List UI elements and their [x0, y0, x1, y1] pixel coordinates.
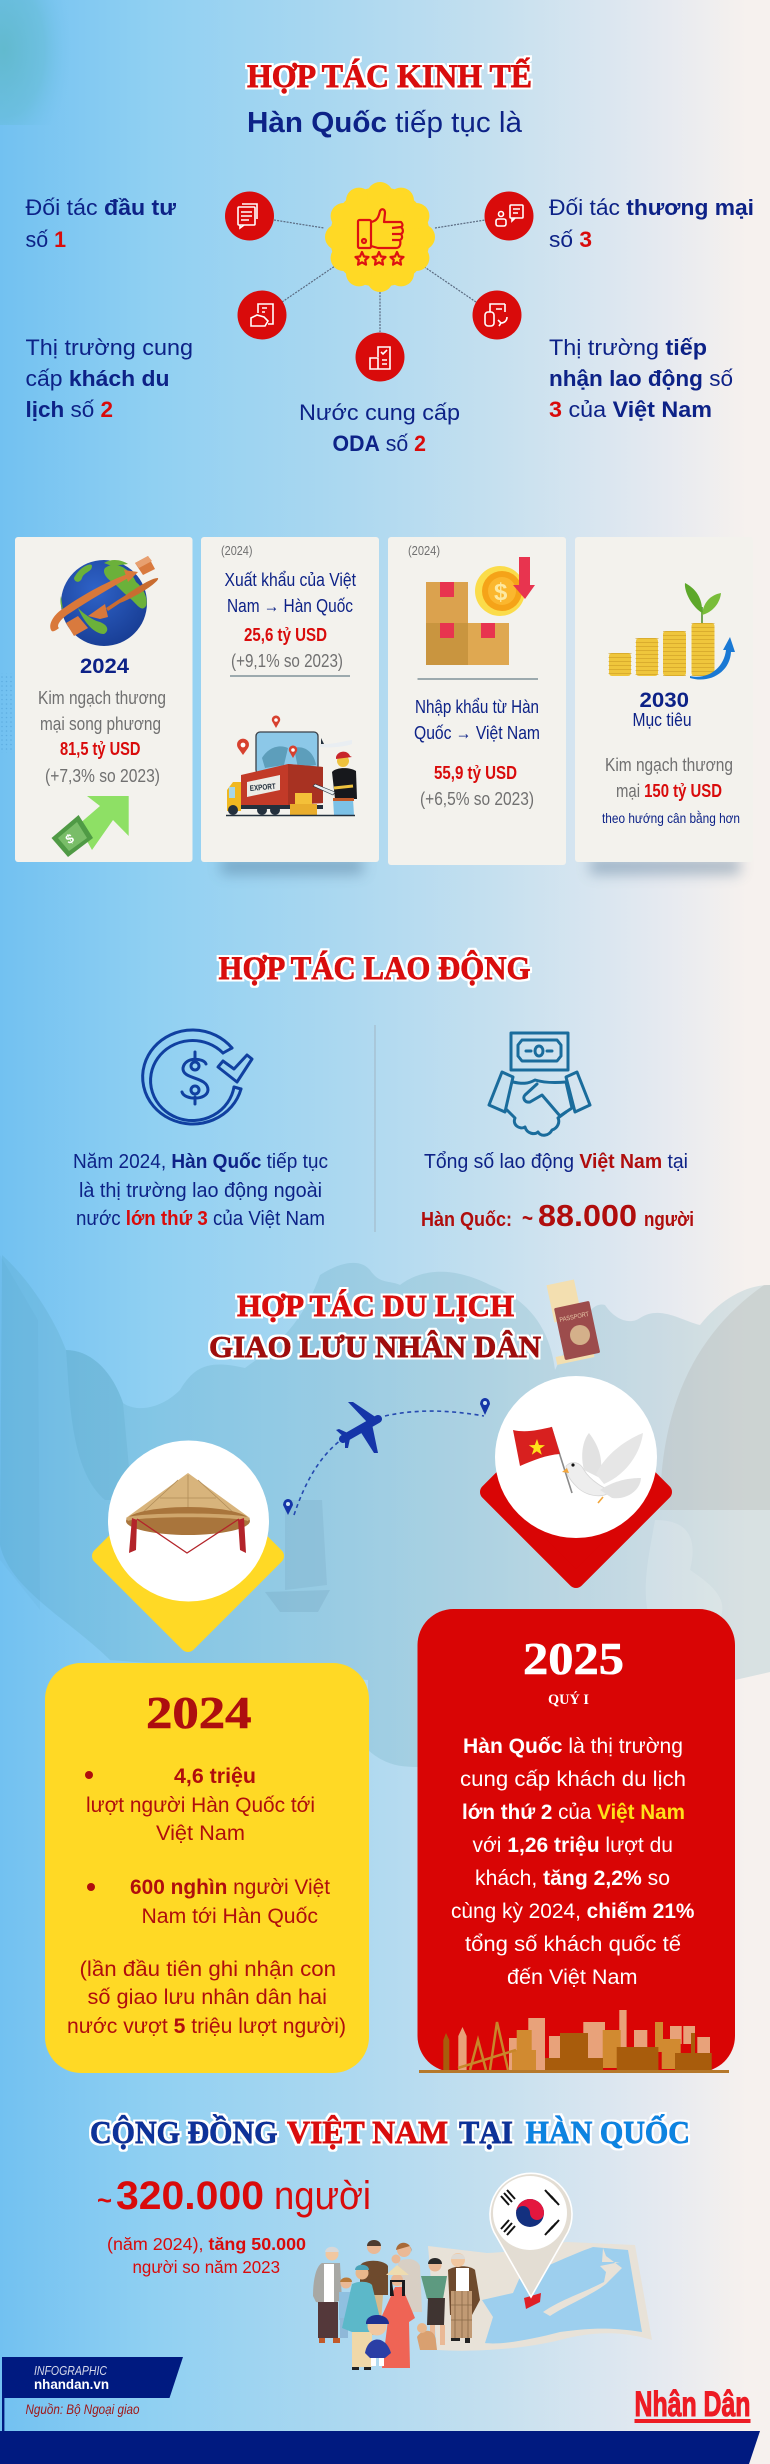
child in blue — [365, 2315, 391, 2366]
text: export value — [224, 570, 356, 671]
quarter: QUÝ I — [548, 1691, 589, 1708]
title: hợp tác kinh tế: HỢP TÁC KINH TẾ — [247, 56, 532, 95]
icon: dove — [562, 1433, 643, 1503]
bullet: 4,6 million: 4,6 triệu — [174, 1765, 256, 1788]
icon node: investment partner — [225, 192, 274, 240]
heading: cộng đồng việt nam tại hàn quốc — [90, 2114, 690, 2150]
text: tourist market — [26, 335, 193, 422]
heading: giao lưu nhân dân: GIAO LƯU NHÂN DÂN — [209, 1329, 541, 1364]
panel: card imports — [388, 537, 566, 865]
stat: 320.000 people: ~ — [97, 2185, 112, 2215]
text: description: 81,5 tỷ USD — [60, 739, 140, 759]
text: investment partner: Đối tác đầu tư — [26, 195, 177, 220]
heading: cộng đồng việt nam tại hàn quốc: HÀN QUỐC — [526, 2114, 690, 2150]
text: Q1 tourism: khách, tăng 2,2% so — [475, 1867, 670, 1890]
icon: globe with arrows — [50, 556, 158, 646]
text: trade partner: Đối tác thương mại — [549, 195, 754, 220]
background: Ha Long bay silhouettes — [0, 1255, 770, 1767]
bottom bar — [0, 2431, 760, 2464]
text: investment partner: số 1 — [26, 227, 66, 252]
connector lines — [274, 220, 485, 332]
marker: 2024 conical hat — [100, 1440, 276, 1644]
bullet: 4,6 million — [85, 1765, 315, 1845]
heading: cộng đồng việt nam tại hàn quốc: VIỆT NAM — [287, 2114, 448, 2150]
bullet: 4,6 million: Việt Nam — [156, 1822, 245, 1845]
text: Q1 tourism: cung cấp khách du lịch — [460, 1768, 686, 1791]
panel: 2025 red card — [418, 1609, 735, 2073]
text: 88.000 workers: Hàn Quốc: — [421, 1209, 512, 1231]
text: investment partner — [26, 195, 177, 252]
text: Q1 tourism: đến Việt Nam — [507, 1966, 638, 1989]
text: labour market rank — [73, 1151, 328, 1230]
text: Q1 tourism: với 1,26 triệu lượt du — [472, 1834, 673, 1857]
text: description — [38, 688, 166, 786]
text: tourist market: Thị trường cung — [26, 335, 193, 360]
note: nước vượt 5 triệu lượt người) — [67, 2015, 346, 2038]
illustration: boxes and coin — [426, 557, 535, 665]
icon: plane — [336, 1402, 378, 1453]
text: ODA provider — [299, 400, 460, 456]
panel: 2024 yellow card — [45, 1663, 369, 2073]
note — [67, 1958, 346, 2038]
boy in green shirt — [421, 2258, 447, 2345]
woman in red ao dai — [381, 2265, 415, 2368]
icon: dollar circular arrow — [143, 1030, 252, 1124]
text: 88.000 workers: 88.000 — [538, 1198, 637, 1233]
text: description: mại song phương — [40, 714, 161, 734]
text: 88.000 workers: người — [644, 1209, 694, 1231]
text: Q1 tourism: cùng kỳ 2024, chiếm 21% — [451, 1900, 695, 1923]
text: ODA provider: Nước cung cấp — [299, 400, 460, 425]
text: labour market rank: là thị trường lao động ngoài — [79, 1180, 322, 1202]
text: trade partner: số 3 — [549, 227, 592, 252]
bullet: 600 thousand: 600 nghìn người Việt — [130, 1876, 330, 1899]
text: target value — [605, 755, 733, 801]
text: labour market rank: Năm 2024, Hàn Quốc tiếp tục — [73, 1151, 328, 1173]
site name: nhandan.vn — [34, 2376, 109, 2392]
bullet: 600 thousand — [87, 1876, 330, 1928]
text: ODA provider: ODA số 2 — [332, 431, 426, 456]
text: Q1 tourism — [451, 1735, 695, 1989]
year: 2024 — [80, 655, 129, 678]
stat: 320.000 people: người — [274, 2174, 371, 2218]
panel: card 2030 target — [575, 537, 753, 862]
marker: 2025 flag and dove — [488, 1376, 664, 1580]
icon: passport: PASSPORT — [559, 1311, 590, 1324]
elder man — [313, 2247, 342, 2343]
stat: 320.000 people — [97, 2174, 371, 2218]
illustration: coin stacks and sprout — [609, 583, 735, 680]
text: trade partner — [549, 195, 754, 252]
panel: card exports — [201, 537, 379, 862]
source credit: Nguồn: Bộ Ngoại giao — [26, 2401, 140, 2417]
text: Q1 tourism: tổng số khách quốc tế — [465, 1933, 681, 1956]
icon node: tourist market — [238, 290, 286, 340]
text: tourist market: cấp khách du — [26, 366, 170, 391]
text: export value: (+9,1% so 2023) — [231, 651, 343, 671]
illustration: city skyline — [419, 2010, 729, 2073]
flight route — [283, 1398, 490, 1515]
text: description: (+7,3% so 2023) — [45, 766, 160, 786]
text: target value: mại 150 tỷ USD — [616, 781, 722, 801]
year tag: (2024) — [408, 543, 440, 558]
man in teal — [342, 2265, 380, 2370]
bullet: 4,6 million: lượt người Hàn Quốc tới — [86, 1794, 315, 1817]
text: 88.000 workers: ~ — [522, 1205, 533, 1232]
elder in plaid — [448, 2253, 480, 2343]
balance note: theo hướng cân bằng hơn — [602, 810, 740, 826]
year: 2025 — [523, 1634, 624, 1684]
text: export value: 25,6 tỷ USD — [244, 625, 327, 645]
text: labour market rank: nước lớn thứ 3 của Việt Nam — [76, 1208, 325, 1230]
text: import value: (+6,5% so 2023) — [420, 789, 534, 809]
stat: 320.000 people: 320.000 — [116, 2174, 264, 2218]
text: labour market: 3 của Việt Nam — [549, 397, 712, 422]
note: (lần đầu tiên ghi nhận con — [80, 1958, 336, 1981]
text: target value: Kim ngạch thương — [605, 755, 733, 775]
text: tourist market: lịch số 2 — [26, 397, 113, 422]
icon node: labour market — [472, 290, 522, 340]
text: import value — [414, 697, 540, 809]
text: labour market: Thị trường tiếp — [549, 335, 707, 360]
icon: money with green arrow — [52, 796, 129, 857]
illustration: map of Korea and Japan — [428, 2242, 652, 2351]
illustration: export truck: EXPORT — [249, 782, 276, 793]
crouching child — [417, 2323, 437, 2350]
note: số giao lưu nhân dân hai — [88, 1986, 327, 2009]
target label: Mục tiêu — [632, 710, 692, 730]
icon: handshake with banknote — [489, 1033, 590, 1135]
background blob top left — [0, 0, 76, 125]
heading: cộng đồng việt nam tại hàn quốc: TẠI — [459, 2114, 513, 2150]
icon: thumbs up with stars — [356, 209, 404, 265]
badge — [325, 182, 435, 292]
text: description: Kim ngạch thương — [38, 688, 166, 708]
year: 2030 — [640, 689, 689, 712]
subtitle: Hàn Quốc tiếp tục là — [247, 107, 523, 139]
card shadows — [221, 858, 740, 874]
year: 2024 — [146, 1688, 252, 1738]
text: total workers: Tổng số lao động Việt Nam tại — [424, 1151, 688, 1173]
woman with baby — [392, 2243, 422, 2312]
text: Q1 tourism: lớn thứ 2 của Việt Nam — [462, 1801, 685, 1824]
icon: location pin with Korean flag — [490, 2173, 572, 2297]
text: import value: Quốc → Việt Nam — [414, 723, 540, 743]
text: export value: Xuất khẩu của Việt — [224, 570, 356, 590]
text: increase note — [107, 2234, 306, 2277]
text: import value: 55,9 tỷ USD — [434, 763, 517, 783]
heading: hợp tác lao động: HỢP TÁC LAO ĐỘNG — [218, 949, 530, 987]
illustration: export truck — [226, 716, 357, 816]
text: import value: Nhập khẩu từ Hàn — [415, 697, 539, 717]
panel: card 2024 bilateral trade — [15, 537, 192, 862]
icon: vietnam flag — [513, 1427, 572, 1493]
year tag: (2024) — [221, 543, 252, 558]
text: export value: Nam → Hàn Quốc — [227, 596, 353, 616]
text: 88.000 workers — [421, 1198, 694, 1233]
infographic label: INFOGRAPHIC — [34, 2363, 107, 2378]
text: labour market: nhận lao động số — [549, 366, 733, 391]
man in brown jacket — [360, 2240, 388, 2335]
bullet: 600 thousand: Nam tới Hàn Quốc — [142, 1905, 318, 1928]
icon node: ODA provider — [356, 332, 404, 382]
icon node: trade partner — [484, 192, 534, 240]
young girl — [339, 2278, 353, 2338]
heading: hợp tác du lịch: HỢP TÁC DU LỊCH — [237, 1288, 514, 1323]
hub diagram — [225, 182, 534, 382]
illustration: boxes and coin: $ — [494, 579, 508, 606]
text: increase note: người so năm 2023 — [132, 2257, 280, 2277]
source tag — [2, 2357, 183, 2431]
icon: money with green arrow: $ — [63, 830, 77, 847]
text: labour market — [549, 335, 733, 422]
text: increase note: (năm 2024), tăng 50.000 — [107, 2234, 306, 2254]
icon: conical hat — [126, 1473, 250, 1553]
icon: passport — [547, 1279, 600, 1365]
illustration: Vietnamese community group — [313, 2240, 480, 2370]
heading: cộng đồng việt nam tại hàn quốc: CỘNG ĐỒNG — [90, 2114, 278, 2150]
text: Q1 tourism: Hàn Quốc là thị trường — [463, 1735, 683, 1758]
